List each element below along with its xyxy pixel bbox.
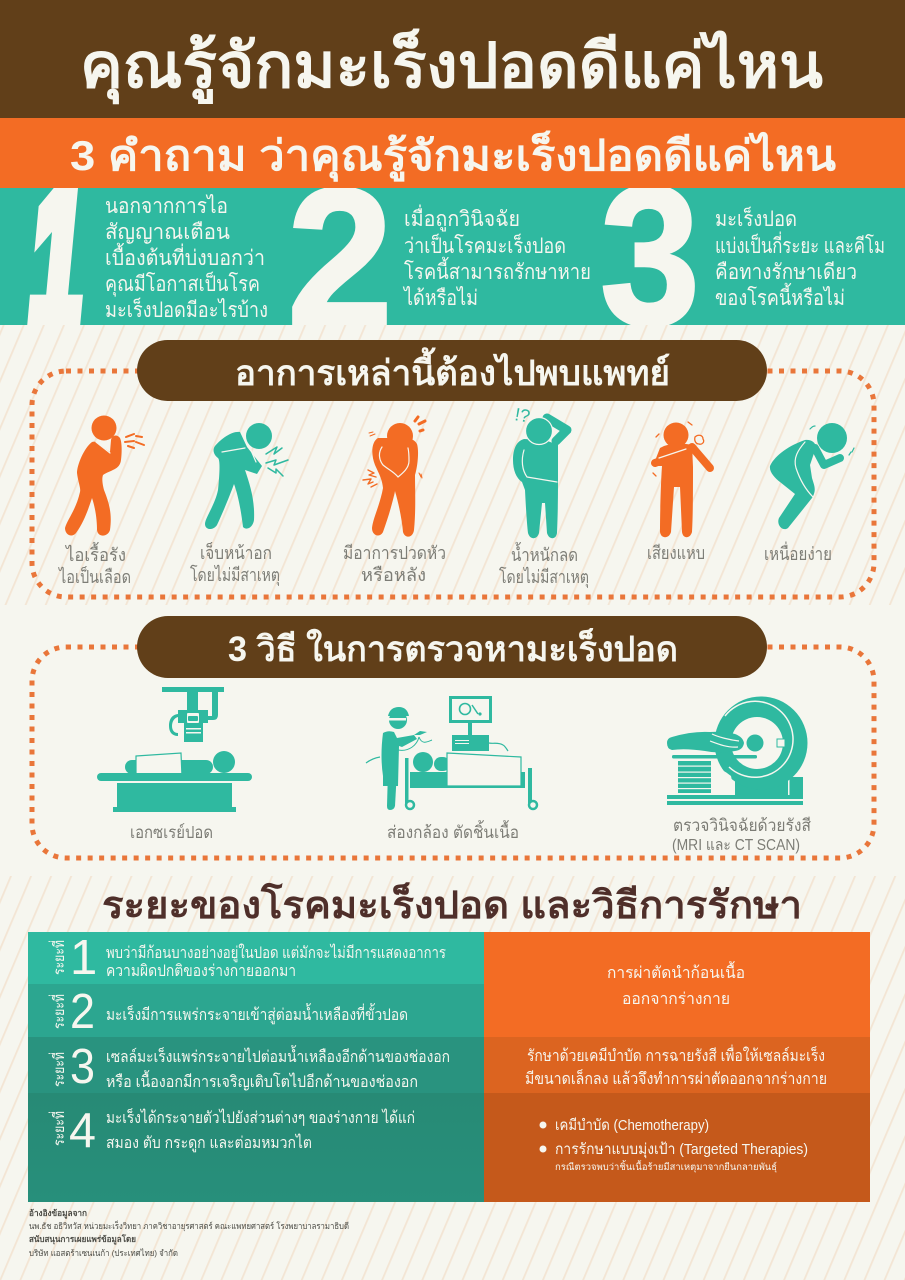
treatment for stages 1 and 2 <box>607 961 745 1008</box>
symptom labels: เสียงแหบ <box>647 543 705 563</box>
icon: chest pain person <box>205 423 288 529</box>
question 2 text <box>402 204 591 310</box>
diagnosis labels <box>130 816 812 854</box>
treatment for stages 1 and 2: ออกจากร่างกาย <box>622 991 730 1008</box>
symptom labels: โดยไม่มีสาเหตุ <box>190 564 280 586</box>
question 3 text: มะเร็งปอด <box>715 205 797 231</box>
symptom labels: ไอเรื้อรัง <box>64 542 126 565</box>
footer: references: บริษัท แอสตร้าเซนเนก้า (ประเทศไทย) จำกัด <box>29 1248 178 1258</box>
footer: references: นพ.ธัช อธิวิทวัส หน่วยมะเร็งวิทยา ภาควิชาอายุรศาสตร์ คณะแพทยศาสตร์ โรงพยาบาลรามาธิบดี <box>29 1220 349 1232</box>
icon: weight loss person <box>513 404 567 538</box>
stage 1 <box>48 931 446 985</box>
stage 2: 2 <box>70 985 95 1039</box>
treatment for stage 3: รักษาด้วยเคมีบำบัด การฉายรังสี เพื่อให้เซลล์มะเร็ง <box>527 1044 825 1065</box>
question 1 text: เบื้องต้นที่บ่งบอกว่า <box>105 243 265 270</box>
treatment for stage 4: กรณีตรวจพบว่าชิ้นเนื้อร้ายมีสาเหตุมาจากยีนกลายพันธุ์ <box>555 1160 777 1173</box>
question 2 text: เมื่อถูกวินิจฉัย <box>404 204 520 232</box>
icon: headache and back pain person <box>363 417 425 537</box>
treatment for stage 4 <box>540 1117 808 1173</box>
symptom labels: เหนื่อยง่าย <box>764 541 832 564</box>
symptom labels: เจ็บหน้าอก <box>200 541 272 563</box>
table: treatments <box>484 932 870 1202</box>
icon: chest x-ray <box>97 687 252 812</box>
question 1 number: 1 <box>30 146 83 368</box>
diagnosis labels: ตรวจวินิจฉัยด้วยรังสี <box>673 816 812 835</box>
icon: hoarse voice person <box>653 422 710 537</box>
stage 2: มะเร็งมีการแพร่กระจายเข้าสู่ต่อมน้ำเหลืองที่ขั้วปอด <box>106 1003 408 1025</box>
treatment for stage 4: การรักษาแบบมุ่งเป้า (Targeted Therapies) <box>555 1141 808 1159</box>
question 1 text <box>105 194 268 322</box>
treatment for stage 3 <box>525 1044 827 1088</box>
symptom labels <box>57 541 832 588</box>
question 1 text: คุณมีโอกาสเป็นโรค <box>105 270 260 297</box>
title banner: คุณรู้จักมะเร็งปอดดีแค่ไหน <box>80 28 823 104</box>
question 3 text: ของโรคนี้หรือไม่ <box>715 283 845 310</box>
stage 1: 1 <box>70 931 97 985</box>
icon: coughing person <box>65 416 144 536</box>
icon: fatigued person <box>770 423 854 529</box>
heading: diagnosis methods: 3 วิธี ในการตรวจหามะเร็งปอด <box>228 627 678 669</box>
symptom labels: หรือหลัง <box>361 565 426 585</box>
panel: symptoms <box>32 340 874 597</box>
question 2 text: ว่าเป็นโรคมะเร็งปอด <box>404 232 566 258</box>
stage 1: ระยะที่ <box>48 940 68 975</box>
heading: symptoms: อาการเหล่านี้ต้องไปพบแพทย์ <box>235 347 670 393</box>
subtitle banner <box>0 118 905 188</box>
heading: diagnosis methods <box>137 616 767 678</box>
stage 4 <box>48 1104 415 1158</box>
symptom labels: น้ำหนักลด <box>511 542 578 565</box>
footer: references: อ้างอิงข้อมูลจาก <box>29 1208 87 1219</box>
stage 4: สมอง ตับ กระดูก และต่อมหมวกไต <box>106 1133 312 1153</box>
diagnosis labels: ส่องกล้อง ตัดชิ้นเนื้อ <box>387 820 519 842</box>
title banner <box>0 0 905 118</box>
question 3 number: 3 <box>600 145 700 366</box>
question 2 text: ได้หรือไม่ <box>402 286 478 310</box>
icon: CT and MRI scanner <box>667 696 808 805</box>
question 1 text: มะเร็งปอดมีอะไรบ้าง <box>105 296 268 322</box>
stage 2: ระยะที่ <box>48 994 68 1029</box>
stage 4: 4 <box>69 1104 96 1158</box>
diagnosis labels: เอกซเรย์ปอด <box>130 823 213 842</box>
stage 4: มะเร็งได้กระจายตัวไปยังส่วนต่างๆ ของร่างกาย ได้แก่ <box>106 1107 415 1127</box>
question 1 text: สัญญาณเตือน <box>105 221 230 244</box>
panel: three questions <box>0 188 905 325</box>
heading: symptoms <box>137 340 767 401</box>
question 2 text: โรคนี้สามารถรักษาหาย <box>404 257 591 284</box>
stage 3 <box>48 1040 450 1094</box>
icon: weight loss person: !? <box>513 404 532 427</box>
subtitle banner: 3 คำถาม ว่าคุณรู้จักมะเร็งปอดดีแค่ไหน <box>70 130 836 182</box>
heading: stages and treatment: ระยะของโรคมะเร็งปอด และวิธีการรักษา <box>102 882 802 927</box>
footer: references: สนับสนุนการเผยแพร่ข้อมูลโดย <box>29 1234 136 1245</box>
diagnosis labels: (MRI และ CT SCAN) <box>672 837 800 854</box>
stage 1: ความผิดปกติของร่างกายออกมา <box>106 963 296 980</box>
symptom labels: มีอาการปวดหัว <box>343 543 446 563</box>
stage 3: หรือ เนื้องอกมีการเจริญเติบโตไปอีกด้านของช่องอก <box>106 1070 418 1091</box>
question 2 number: 2 <box>287 147 393 368</box>
treatment for stages 1 and 2: การผ่าตัดนำก้อนเนื้อ <box>607 961 745 982</box>
footer: references <box>29 1208 349 1258</box>
treatment for stage 4: เคมีบำบัด (Chemotherapy) <box>555 1117 709 1134</box>
treatment for stage 3: มีขนาดเล็กลง แล้วจึงทำการผ่าตัดออกจากร่างกาย <box>525 1068 827 1088</box>
stage 3: ระยะที่ <box>48 1052 68 1087</box>
icon: bronchoscopy and biopsy <box>366 696 537 810</box>
symptom labels: ไอเป็นเลือด <box>57 565 131 587</box>
stage 3: เซลล์มะเร็งแพร่กระจายไปต่อมน้ำเหลืองอีกด้านของช่องอก <box>106 1045 450 1066</box>
question 1 text: นอกจากการไอ <box>105 194 228 218</box>
stage 1: พบว่ามีก้อนบางอย่างอยู่ในปอด แต่มักจะไม่มีการแสดงอาการ <box>106 943 446 963</box>
table: stages of lung cancer <box>28 931 484 1202</box>
question 3 text <box>715 205 885 310</box>
stage 4: ระยะที่ <box>48 1111 68 1146</box>
symptom labels: โดยไม่มีสาเหตุ <box>499 566 589 588</box>
stage 2 <box>48 985 408 1039</box>
stage 3: 3 <box>70 1040 95 1094</box>
panel: diagnosis methods <box>32 616 874 858</box>
question 3 text: คือทางรักษาเดียว <box>715 261 857 284</box>
